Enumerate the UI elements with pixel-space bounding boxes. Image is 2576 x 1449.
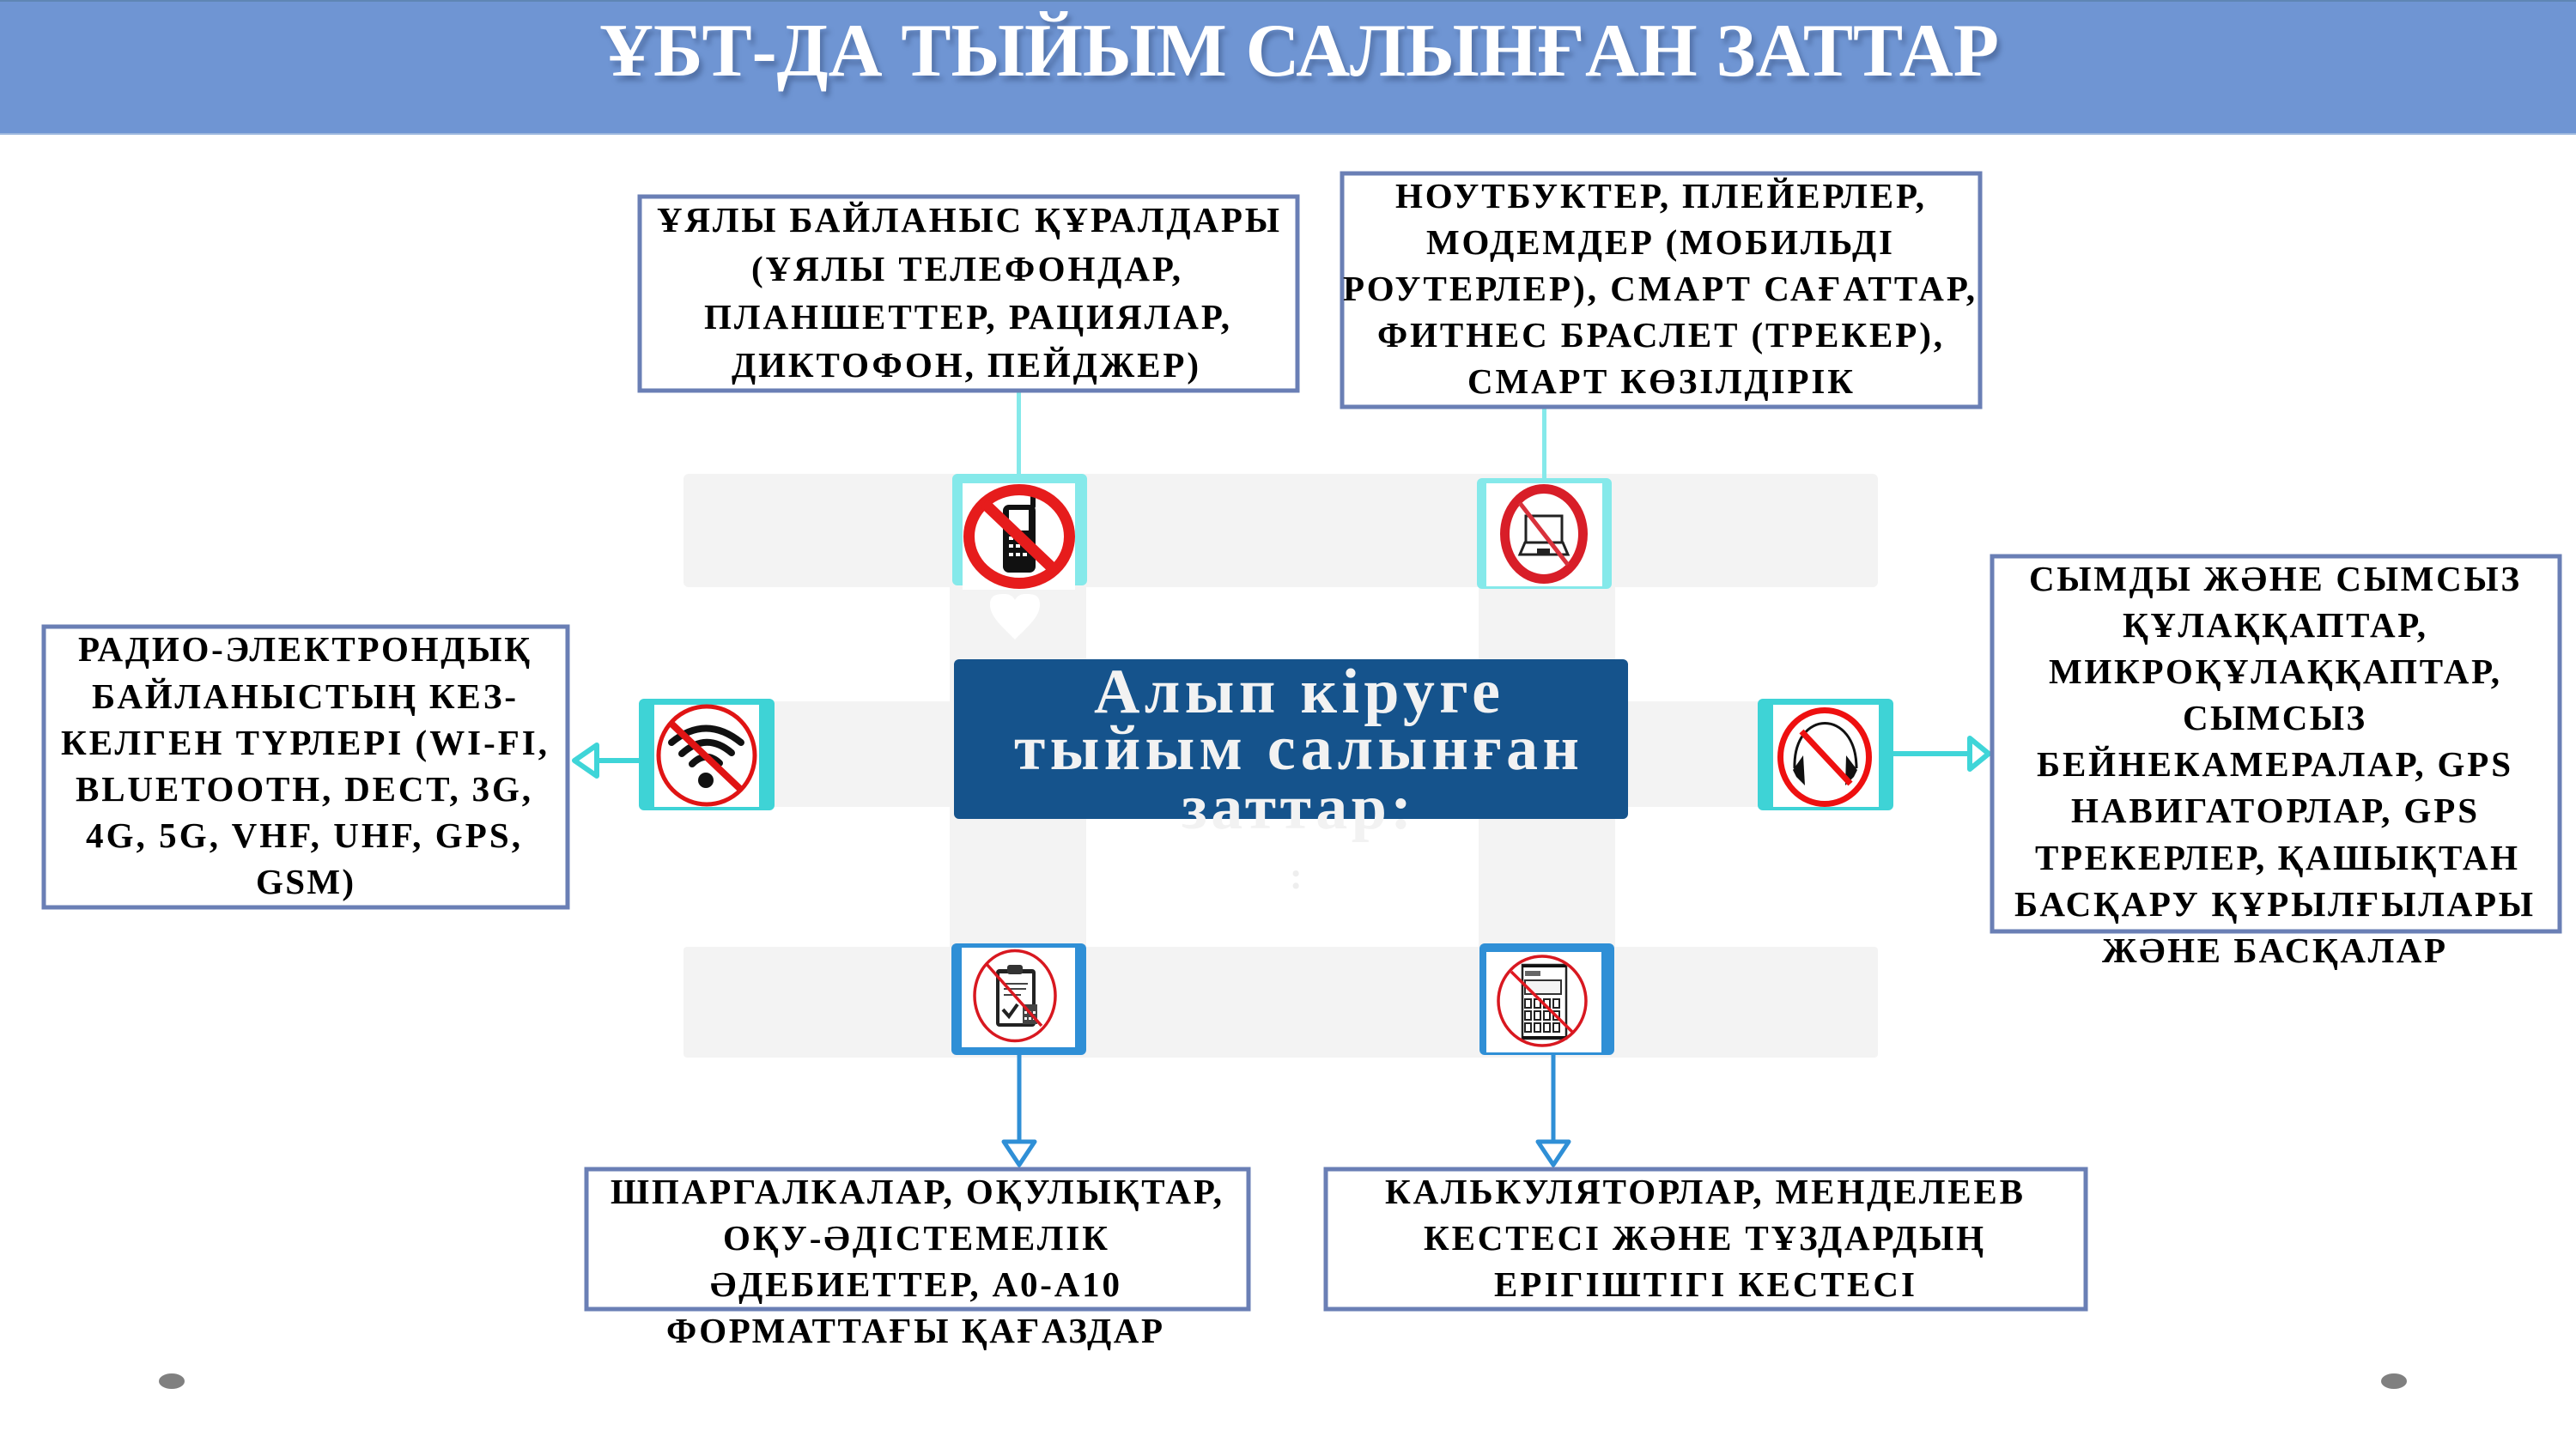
icon: no phone [952, 474, 1087, 590]
connector: calculator arrow [1538, 1055, 1569, 1165]
panel: radio communications: 4G, 5G, VHF, UHF, GPS, [86, 815, 520, 855]
panel: calculators and tables: КЕСТЕСІ ЖӘНЕ ТҰЗДАРДЫҢ [1424, 1218, 1984, 1258]
panel: laptops and smart devices: ФИТНЕС БРАСЛЕТ (ТРЕКЕР), [1377, 315, 1942, 355]
panel: headphones and remote devices: СЫМСЫЗ [2183, 698, 2365, 737]
panel: mobile devices: ПЛАНШЕТТЕР, РАЦИЯЛАР, [704, 297, 1230, 336]
panel: crib sheets and textbooks: ОҚУ-ӘДІСТЕМЕЛІК [723, 1218, 1108, 1258]
panel: crib sheets and textbooks: ӘДЕБИЕТТЕР, А0-А10 [710, 1264, 1120, 1304]
panel: mobile devices [640, 197, 1297, 391]
centre panel [954, 659, 1628, 819]
panel: headphones and remote devices: БЕЙНЕКАМЕРАЛАР, GPS [2037, 744, 2511, 784]
left bottom dot [159, 1373, 185, 1389]
icon: no wifi [639, 699, 775, 810]
icon: no crib sheets [951, 943, 1086, 1055]
centre panel text [1014, 657, 1579, 897]
title: ҰБТ-ДА ТЫЙЫМ САЛЫНҒАН ЗАТТАР [599, 9, 1999, 93]
panel: crib sheets and textbooks: ШПАРГАЛКАЛАР, ОҚУЛЫҚТАР, [611, 1172, 1222, 1211]
panel: headphones and remote devices: СЫМДЫ ЖӘНЕ СЫМСЫЗ [2029, 559, 2519, 598]
panel: mobile devices: (ҰЯЛЫ ТЕЛЕФОНДАР, [751, 249, 1181, 288]
icon: no calculator [1479, 943, 1614, 1055]
panel: radio communications: GSM) [256, 862, 354, 901]
panel: radio communications: БАЙЛАНЫСТЫҢ КЕЗ- [92, 676, 516, 716]
panel: mobile devices: ҰЯЛЫ БАЙЛАНЫС ҚҰРАЛДАРЫ [657, 200, 1279, 239]
panel: radio communications: BLUETOOTH, DECT, 3G, [76, 769, 531, 809]
icon: heart [990, 594, 1040, 640]
panel: headphones and remote devices [1992, 556, 2560, 970]
centre panel text: тыйым салынған [1014, 713, 1579, 784]
connector: wifi arrow [574, 745, 640, 776]
panel: laptops and smart devices: МОДЕМДЕР (МОБИЛЬДІ [1426, 222, 1893, 262]
panel: headphones and remote devices: БАСҚАРУ ҚҰРЫЛҒЫЛАРЫ [2014, 884, 2533, 924]
panel: headphones and remote devices: МИКРОҚҰЛАҚҚАПТАР, [2049, 652, 2500, 691]
centre panel text: : [1290, 855, 1303, 897]
panel: radio communications [44, 627, 568, 907]
panel: calculators and tables: ЕРІГІШТІГІ КЕСТЕСІ [1494, 1264, 1915, 1304]
panel: laptops and smart devices: НОУТБУКТЕР, ПЛЕЙЕРЛЕР, [1395, 176, 1924, 215]
connector: phone to box [1017, 391, 1021, 475]
panel: crib sheets and textbooks: ФОРМАТТАҒЫ ҚАҒАЗДАР [666, 1311, 1163, 1350]
background grid strips [683, 474, 1878, 1058]
panel: headphones and remote devices: НАВИГАТОРЛАР, GPS [2071, 791, 2477, 830]
connector: headphones arrow [1893, 738, 1989, 769]
panel: mobile devices: ДИКТОФОН, ПЕЙДЖЕР) [732, 345, 1199, 385]
panel: headphones and remote devices: ТРЕКЕРЛЕР, ҚАШЫҚТАН [2035, 838, 2518, 877]
connector: laptop to box [1542, 408, 1546, 479]
icon: no headphones [1758, 699, 1893, 810]
panel: calculators and tables: КАЛЬКУЛЯТОРЛАР, МЕНДЕЛЕЕВ [1385, 1172, 2023, 1211]
centre panel text: заттар: [1182, 773, 1412, 843]
panel: crib sheets and textbooks [586, 1169, 1249, 1350]
panel: laptops and smart devices [1342, 173, 1980, 407]
panel: headphones and remote devices: ЖӘНЕ БАСҚАЛАР [2102, 931, 2445, 970]
right bottom dot [2381, 1373, 2407, 1389]
panel: headphones and remote devices: ҚҰЛАҚҚАПТАР, [2123, 605, 2426, 645]
panel: calculators and tables [1326, 1169, 2086, 1309]
icon: no laptop [1477, 478, 1612, 589]
panel: laptops and smart devices: РОУТЕРЛЕР), СМАРТ САҒАТТАР, [1343, 269, 1975, 308]
centre panel text: Алып кіруге [1094, 657, 1500, 727]
connector: clipboard arrow [1004, 1055, 1035, 1165]
panel: radio communications: КЕЛГЕН ТҮРЛЕРІ (WI-FI, [61, 723, 547, 762]
panel: radio communications: РАДИО-ЭЛЕКТРОНДЫҚ [78, 629, 530, 669]
header banner [0, 0, 2576, 135]
panel: laptops and smart devices: СМАРТ КӨЗІЛДІРІК [1467, 361, 1853, 401]
